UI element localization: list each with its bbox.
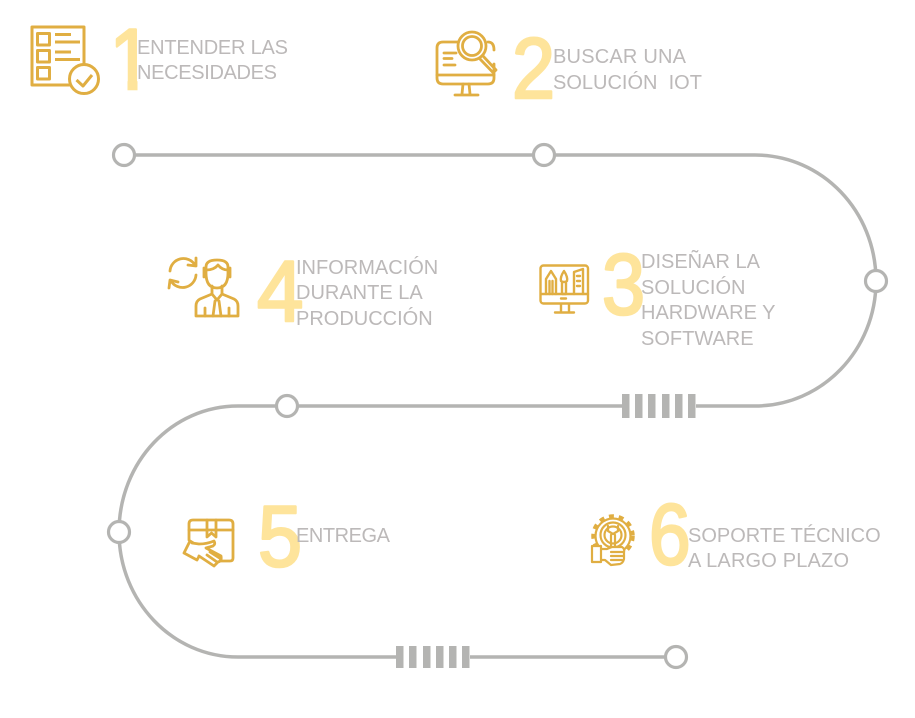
text: disenar la solucion: HARDWARE Y (641, 302, 775, 324)
number 2: 2 (512, 21, 555, 117)
text: disenar la solucion: DISEÑAR LA (641, 249, 761, 273)
icon: monitor with magnifier (437, 32, 496, 95)
step 1 (30, 26, 287, 95)
icon: package in hand (184, 520, 233, 566)
number 5: 5 (258, 488, 302, 585)
text: informacion durante la produccion: DURANTE LA (296, 282, 423, 304)
text: informacion durante la produccion: PRODUCCIÓN (296, 307, 433, 330)
text: informacion durante la produccion: INFORMACIÓN (296, 256, 438, 279)
step 5 (184, 488, 391, 585)
icon: gear and wrench (592, 516, 633, 565)
number 6: 6 (649, 487, 691, 583)
text: entrega: ENTREGA (296, 525, 391, 547)
text: disenar la solucion: SOLUCIÓN (641, 276, 745, 299)
icon: design monitor (540, 266, 588, 312)
number 1: 1 (110, 12, 153, 108)
text: entender las necesidades: NECESIDADES (137, 62, 277, 84)
winding timeline (108, 144, 886, 668)
icon: person with refresh arrows (169, 258, 238, 316)
text: buscar una solucion iot: SOLUCIÓN IOT (553, 71, 702, 94)
text: entender las necesidades: ENTENDER LAS (137, 37, 288, 59)
text: soporte tecnico a largo plazo: SOPORTE TÉCNICO (688, 524, 881, 547)
step 6 (592, 487, 881, 583)
step 4 (169, 243, 438, 339)
number 4: 4 (257, 243, 303, 339)
icon: checklist (32, 27, 98, 94)
step 3 (540, 237, 775, 350)
text: buscar una solucion iot: BUSCAR UNA (553, 46, 687, 68)
text: disenar la solucion: SOFTWARE (641, 328, 754, 350)
text: soporte tecnico a largo plazo: A LARGO PLAZO (688, 550, 849, 572)
step 2 (437, 21, 702, 117)
number 3: 3 (602, 237, 645, 333)
